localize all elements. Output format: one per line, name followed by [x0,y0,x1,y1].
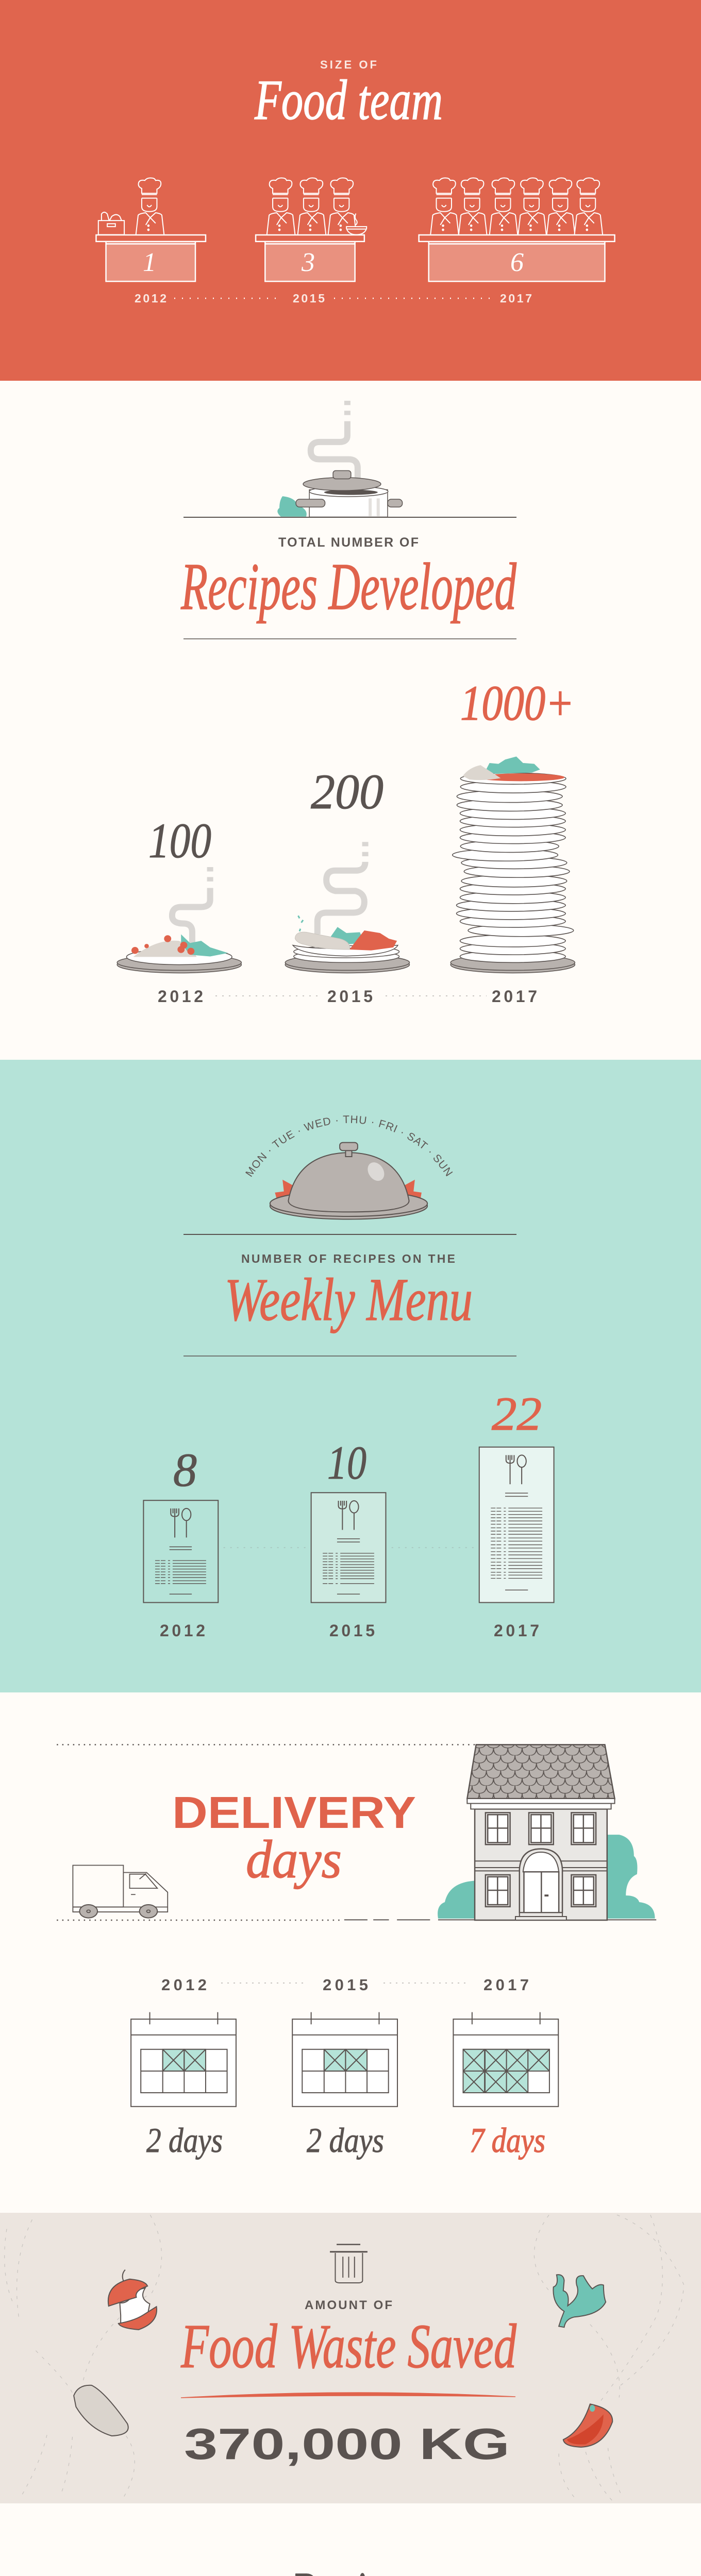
counter 2015 [256,235,364,281]
value: 7 days 2017: 7 days [470,2121,545,2160]
icon: bread [74,2385,128,2436]
value: 370,000 kg: 370,000 KG [184,2420,510,2469]
icon: grocery box [98,212,124,234]
icon: chili [563,2404,612,2447]
food scrap icons [74,2270,612,2447]
plate stack 2017 [450,756,575,973]
menu card 2012 [143,1500,218,1603]
eyebrow: number of recipes: NUMBER OF RECIPES ON THE [241,1252,455,1265]
heading: food team: Food team [254,69,443,131]
panel: food waste saved [0,2213,701,2503]
heading: days: days [246,1829,342,1889]
count 1: 1 [143,248,156,277]
eyebrow: size of: SIZE OF [320,58,377,71]
timeline years: 2012 [135,292,166,305]
counter 2017 [419,235,615,281]
menu card 2015 [311,1493,386,1603]
panel: recipes [295,2573,365,2576]
calendar 2017 [453,2012,558,2107]
icon: trash can [330,2245,368,2283]
timeline years: 2015 [327,987,373,1006]
value 8: 8 [173,1444,197,1496]
timeline years: 2012 [158,987,203,1006]
timeline years: 2015 [293,292,325,305]
dish 2012 [117,867,241,973]
timeline years [135,292,532,305]
chefs 2015 [267,178,356,234]
delivery calendars [131,2012,558,2107]
chefs 2017 [430,178,603,234]
icon: seaweed [553,2275,606,2327]
underline brush [181,2393,515,2398]
heading: weekly menu: Weekly Menu [225,1266,473,1333]
road and delivery van [57,1744,656,1920]
icon: steaming pot [277,401,403,517]
icon: cloche [270,1143,427,1219]
heading: delivery: DELIVERY [172,1788,416,1838]
timeline years: 2015 [323,1976,368,1994]
panel: delivery days [0,1692,701,2213]
panel: weekly menu [0,1060,701,1692]
value 22: 22 [492,1387,542,1440]
value: 2 days 2015: 2 days [307,2121,384,2160]
timeline years [158,987,537,1006]
timeline years: 2017 [500,292,532,305]
value 1000+: 1000+ [460,675,574,731]
menu cards [143,1447,554,1603]
chef 2012 [136,178,164,234]
heading: food waste saved: Food Waste Saved [180,2312,517,2381]
timeline years: 2012 [161,1976,207,1994]
timeline years [160,1621,539,1640]
calendar 2015 [292,2012,397,2107]
count 6: 6 [510,248,524,277]
timeline years: 2012 [160,1621,205,1640]
icon: steaming bowl [346,213,366,234]
timeline years: 2015 [329,1621,375,1640]
value 10: 10 [327,1436,366,1489]
eyebrow: total number of: TOTAL NUMBER OF [278,535,419,550]
chefs and counters [96,178,615,281]
weekdays arc: MON · TUE · WED · THU · FRI · SAT · SUN [245,1115,453,1177]
icon: van [73,1865,168,1918]
menu card 2017 [479,1447,554,1603]
timeline years: 2017 [492,987,537,1006]
eyebrow: amount of: AMOUNT OF [305,2298,392,2312]
calendar 2012 [131,2012,236,2107]
panel: recipes developed [0,381,701,1060]
count 3: 3 [301,248,315,277]
icon: house [438,1744,655,1920]
panel: size of food team [0,0,701,381]
value 200: 200 [311,764,383,819]
icon: apple core [108,2270,157,2330]
timeline years [161,1976,529,1994]
timeline years: 2017 [483,1976,529,1994]
timeline years: 2017 [494,1621,539,1640]
heading: recipes developed: Recipes Developed [180,550,517,624]
dish 2015 [285,842,409,973]
counter 2012 [96,235,206,281]
value: 2 days 2012: 2 days [146,2121,223,2160]
value 100: 100 [148,813,211,868]
